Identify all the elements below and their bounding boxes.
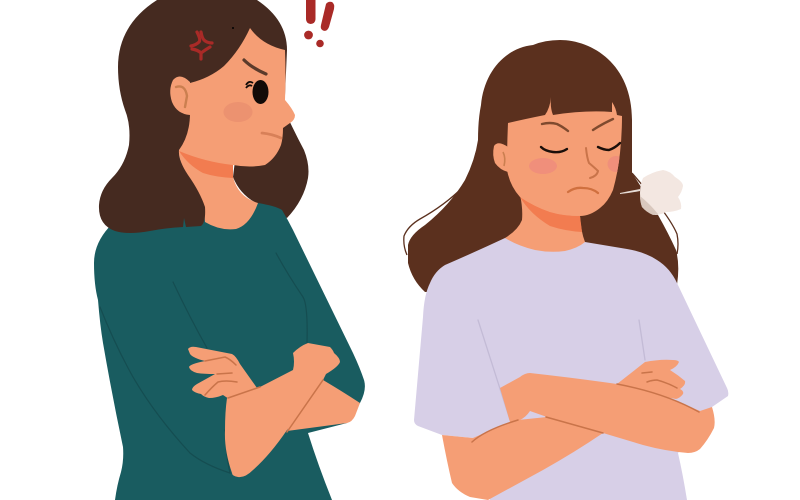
lilac shirt — [414, 238, 728, 500]
neck shadow — [520, 197, 582, 232]
long hair — [408, 40, 678, 292]
mouth — [568, 188, 598, 193]
exclamation marks — [304, 0, 334, 47]
shirt fold lines — [478, 320, 645, 420]
eyebrows — [542, 119, 613, 131]
stray hair strands — [404, 153, 678, 255]
ear — [493, 143, 508, 172]
neck — [178, 148, 258, 229]
face — [179, 28, 295, 166]
figure: right woman in lilac — [404, 40, 728, 500]
figure: left woman in teal — [94, 0, 365, 500]
ear — [170, 76, 190, 115]
blush — [224, 102, 252, 122]
nose — [586, 148, 598, 178]
teal shirt — [94, 203, 365, 500]
fingers of tucked hand — [188, 347, 257, 399]
lower arm — [442, 417, 603, 500]
closed eyes — [541, 143, 620, 152]
mouth — [262, 133, 281, 138]
neck — [505, 195, 585, 252]
front forearm and fist — [225, 343, 340, 477]
stray hair dot — [232, 27, 234, 29]
hand on far side — [617, 360, 685, 399]
arm crease lines — [472, 372, 699, 442]
back forearm — [287, 380, 360, 431]
anger mark — [191, 32, 212, 59]
illustration: two annoyed women — [94, 0, 728, 500]
neck shadow — [179, 151, 233, 178]
eyebrow — [244, 60, 266, 74]
face — [507, 97, 622, 216]
eye and lashes — [246, 80, 268, 104]
steam puff — [620, 170, 683, 215]
back hair right — [233, 118, 308, 218]
front hair — [99, 0, 287, 233]
upper forearm — [500, 373, 715, 453]
blush cheeks — [529, 156, 624, 174]
hand and arm crease lines — [205, 357, 323, 432]
shirt fold lines — [100, 253, 307, 473]
